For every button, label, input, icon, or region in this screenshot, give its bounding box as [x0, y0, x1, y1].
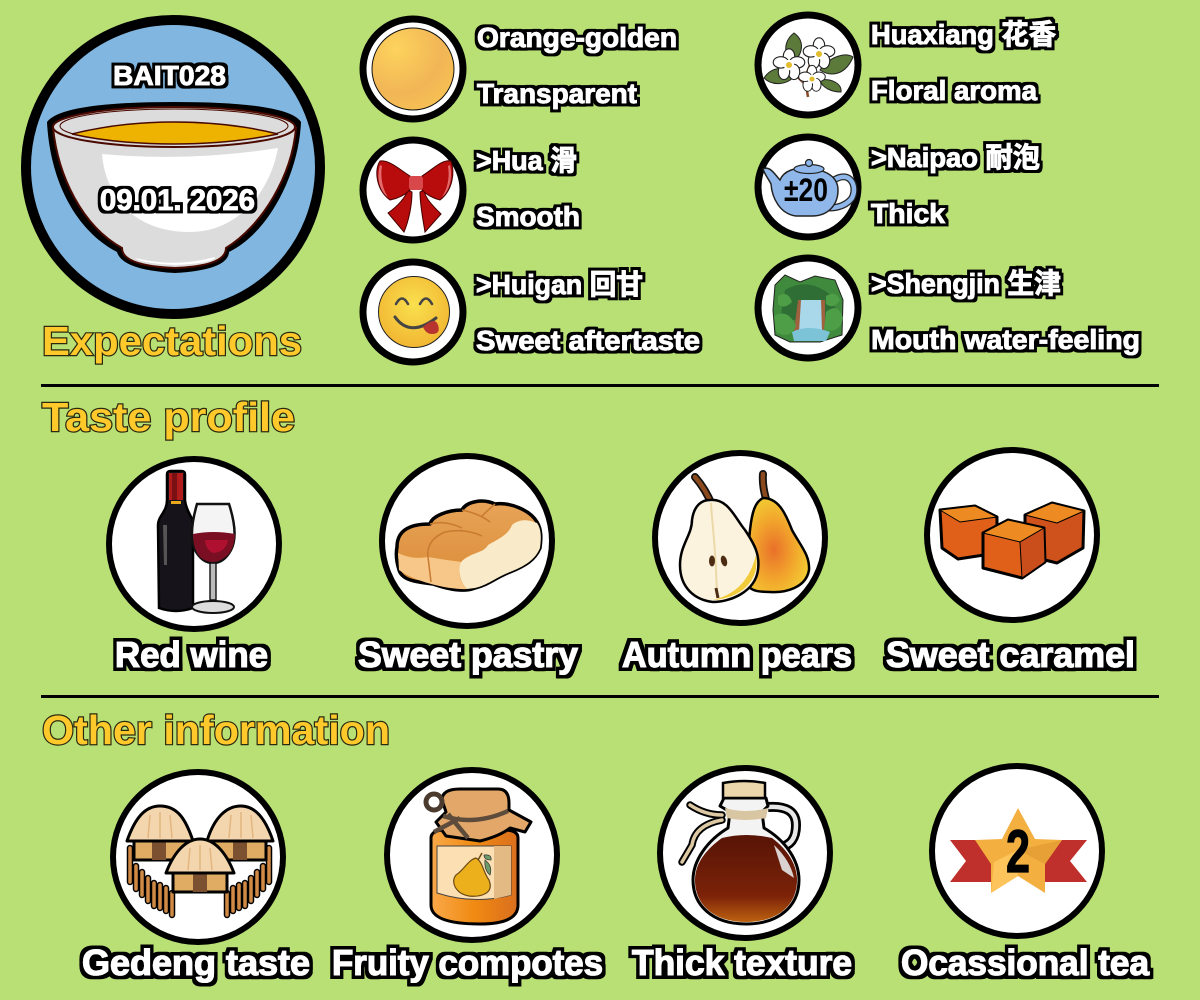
item: thick, teapot: >Naipao 耐泡	[871, 142, 1040, 173]
item: mouth water-feeling, waterfall: Mouth water-feeling	[871, 324, 1140, 355]
tea badge	[26, 20, 320, 314]
item: floral aroma: Floral aroma	[871, 75, 1037, 106]
item: thick texture: Thick texture	[632, 942, 852, 983]
icon: tea bowl	[47, 102, 301, 273]
item: thick texture	[632, 768, 852, 983]
item: gedeng taste: Gedeng taste	[82, 942, 310, 983]
item: red wine: Red wine	[115, 634, 268, 675]
item: autumn pears: Autumn pears	[622, 634, 852, 675]
item: sweet aftertaste	[363, 262, 700, 362]
item: ocassional tea: Ocassional tea	[901, 942, 1150, 983]
item: sweet aftertaste: >Huigan 回甘	[476, 269, 643, 300]
badge code: BAIT028	[113, 60, 226, 91]
item: sweet pastry: Sweet pastry	[358, 634, 578, 675]
item: orange-golden colour: Transparent	[477, 78, 637, 109]
item: sweet caramel: Sweet caramel	[886, 634, 1135, 675]
item: mouth water-feeling, waterfall	[758, 258, 1140, 358]
item: autumn pears	[622, 453, 852, 675]
item: red wine	[109, 459, 279, 675]
heading: expectations: Expectations	[42, 318, 302, 364]
item: sweet aftertaste: Sweet aftertaste	[476, 325, 700, 356]
panel: taste profile	[42, 394, 1135, 675]
item: ocassional tea	[901, 766, 1150, 983]
item: mouth water-feeling, waterfall: >Shengjin 生津	[871, 268, 1061, 299]
item: sweet pastry	[358, 456, 578, 675]
panel: other information	[42, 707, 1150, 983]
heading: other information: Other information	[42, 707, 390, 753]
item: smooth: Smooth	[476, 201, 580, 232]
item: gedeng taste	[82, 772, 310, 983]
item: smooth: >Hua 滑	[476, 145, 577, 176]
item: orange-golden colour: Orange-golden	[477, 22, 677, 53]
item: thick, teapot: Thick	[871, 198, 945, 229]
item: thick, teapot: ±20	[784, 172, 828, 208]
panel: expectations	[26, 15, 1140, 364]
item: smooth	[363, 140, 580, 240]
item: sweet caramel	[886, 450, 1135, 675]
item: orange-golden colour	[363, 19, 677, 119]
item: thick, teapot	[758, 137, 1040, 237]
item: floral aroma: Huaxiang 花香	[871, 19, 1056, 50]
item: fruity compotes: Fruity compotes	[332, 942, 603, 983]
item: ocassional tea: 2	[1006, 818, 1030, 885]
item: floral aroma	[758, 15, 1056, 115]
badge date: 09.01. 2026	[100, 184, 255, 217]
item: fruity compotes	[332, 770, 603, 983]
heading: taste profile: Taste profile	[42, 394, 295, 440]
